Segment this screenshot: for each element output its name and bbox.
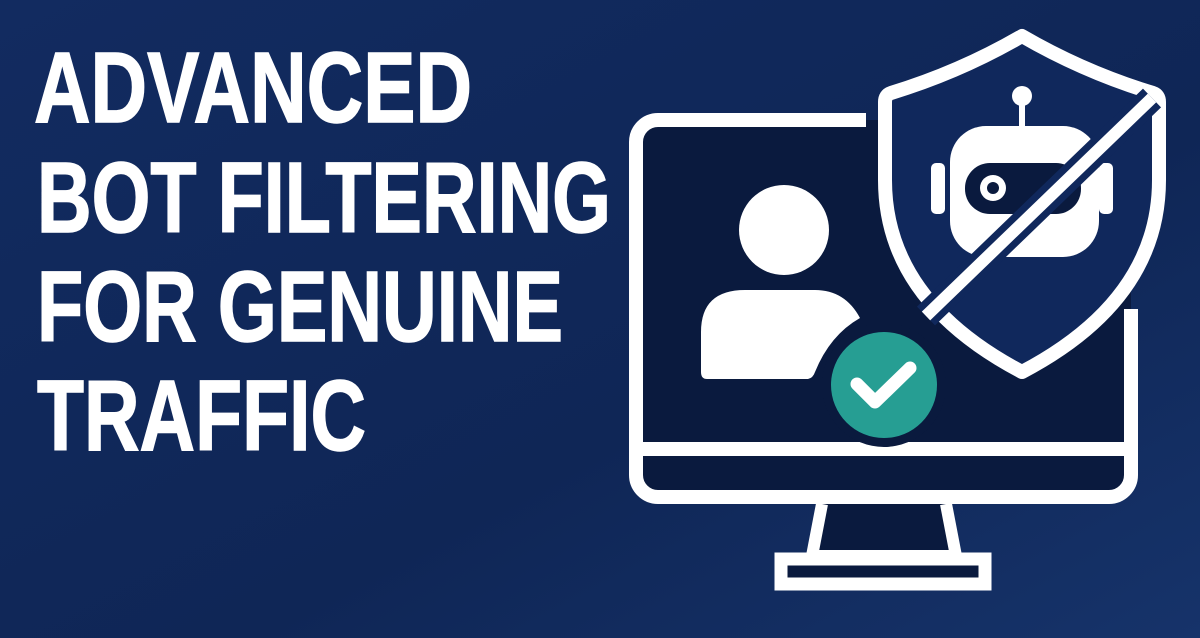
title bbox=[34, 32, 611, 472]
icon: monitor bbox=[636, 120, 1131, 584]
title: ADVANCED bbox=[34, 32, 472, 144]
title: BOT FILTERING bbox=[37, 142, 611, 254]
title: FOR GENUINE bbox=[37, 251, 563, 363]
slash bbox=[926, 98, 1152, 316]
icon: user bbox=[701, 185, 860, 379]
robot bbox=[931, 86, 1113, 257]
monitor stand bbox=[812, 504, 956, 556]
icon: shield with crossed robot bbox=[885, 36, 1159, 372]
title: TRAFFIC bbox=[37, 360, 366, 472]
icon: check badge bbox=[822, 323, 946, 447]
